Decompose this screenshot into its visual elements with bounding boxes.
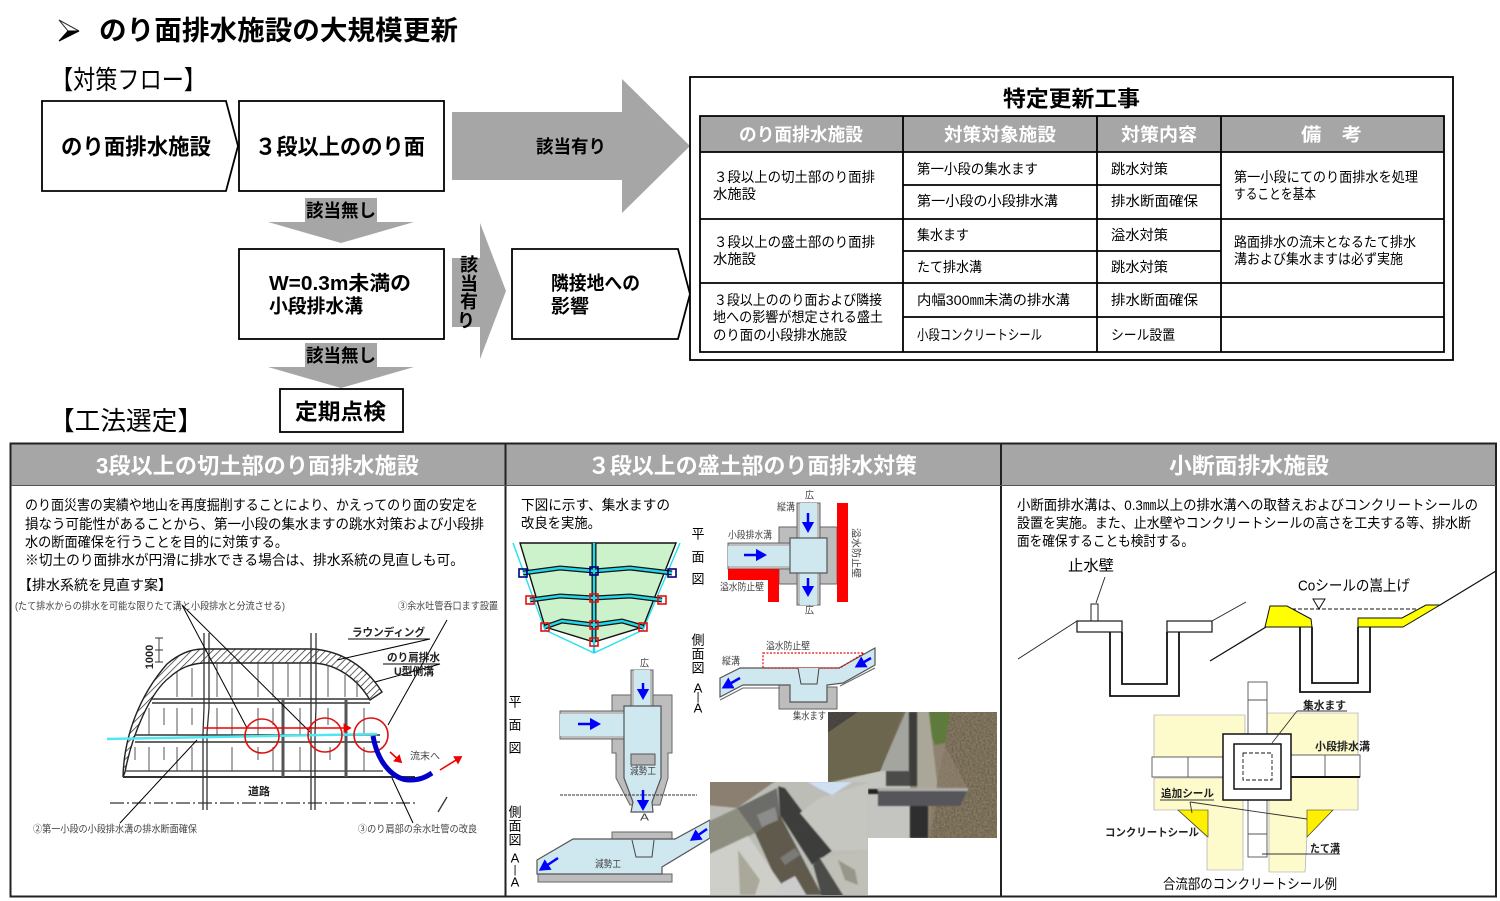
- diagram: lower 平面図 improved basin: A: [640, 812, 649, 824]
- leaders: [1160, 711, 1347, 854]
- table body text: 溝および集水ますは必ず実施: [1234, 251, 1403, 267]
- table body text: することを基本: [1234, 186, 1316, 202]
- text block: panel 2 description: 改良を実施。: [521, 515, 601, 531]
- diagram: 止水壁 channel section: [1018, 558, 1246, 696]
- slope rounding band: [123, 649, 382, 777]
- panel heading 3: 小断面排水施設: [1169, 454, 1329, 478]
- table body text: 排水断面確保: [1111, 193, 1198, 209]
- arrow: 該当無し down 1: [268, 198, 414, 243]
- diagram labels: ③余水吐管呑口ます設置: [398, 600, 498, 612]
- arrow: 該当有り right 2: 該: [460, 255, 478, 275]
- plan labels: たて溝: [1310, 841, 1340, 855]
- cyan drain line: [107, 734, 377, 739]
- plan labels: [1105, 698, 1370, 855]
- diagram: lower 平面図 improved basin: [560, 658, 697, 824]
- text block: panel 2 description: 下図に示す、集水ますの: [521, 497, 670, 513]
- diagram: lower 側面図 improved basin: [537, 820, 710, 882]
- table body text: のり面の小段排水施設: [713, 327, 847, 343]
- table body text: ３段以上ののり面および隣接: [714, 292, 882, 308]
- table header row: 対策対象施設: [944, 125, 1056, 145]
- diagram: 側面図 collection basin: 溢水防止壁: [766, 640, 810, 652]
- diagram: 合流部のコンクリートシール plan: [1105, 682, 1370, 872]
- table body text: 内幅300㎜未満の排水溝: [917, 292, 1070, 308]
- text block: panel 1 description: 【排水系統を見直す案】: [18, 577, 172, 593]
- table body text: [713, 161, 1418, 343]
- label: 平面図 / 側面図 A-A upper: 側: [691, 632, 705, 648]
- labels: 小段排水溝: [728, 528, 772, 542]
- table body text: 地への影響が想定される盛土: [713, 309, 883, 325]
- table body text: 集水ます: [917, 227, 969, 243]
- label: 平面図 / 側面図 A-A lower: 面: [508, 818, 522, 834]
- plan labels: 小段排水溝: [1315, 739, 1370, 753]
- flow: のり面排水施設 box: [42, 101, 238, 191]
- flow: 隣接地への影響 box: 隣接地への: [551, 272, 640, 294]
- arrow: 該当有り right: 該当有り: [536, 137, 606, 157]
- icon: title arrow bullet: [59, 20, 79, 41]
- panel heading 1: 3段以上の切土部のり面排水施設: [96, 454, 419, 478]
- table body text: 水施設: [713, 251, 756, 267]
- diagram labels: 道路: [248, 784, 270, 798]
- text block: panel 1 description: [18, 497, 484, 593]
- table header row: 対策内容: [1121, 125, 1197, 145]
- table body text: 跳水対策: [1111, 161, 1168, 177]
- labels: 溢水防止壁: [720, 580, 764, 594]
- table header row: 備 考: [1301, 125, 1362, 145]
- diagram: lower 側面図 improved basin: 減勢工: [595, 858, 621, 870]
- photo: improved basin close-up: [710, 782, 868, 895]
- label: 平面図 / 側面図 A-A upper: 図: [691, 572, 705, 586]
- label: 平面図 / 側面図 A-A upper: 平: [691, 526, 705, 542]
- heading: 工法選定: 【工法選定】: [49, 406, 203, 436]
- photo: installed drainage on slope: [828, 712, 997, 838]
- diagram labels: ③のり肩部の余水吐管の改良: [358, 822, 477, 836]
- flow: 定期点検 box: 定期点検: [295, 400, 386, 424]
- flow: W=0.3m未満の小段排水溝 box: W=0.3m未満の: [269, 272, 411, 295]
- arrow: 該当有り right 2: [452, 223, 506, 359]
- table body text: 第一小段にてのり面排水を処理: [1234, 169, 1418, 185]
- labels: 広: [805, 490, 814, 502]
- diagram labels: のり肩排水: [387, 650, 440, 664]
- diagram: drainage layout of cut slope: [15, 600, 498, 836]
- arrow: 該当無し down 2: [268, 343, 414, 388]
- diagram labels: 1000: [144, 645, 156, 669]
- diagram: Coシール嵩上げ channel section: [1210, 571, 1496, 692]
- table body text: 跳水対策: [1111, 259, 1168, 275]
- label: 平面図 / 側面図 A-A lower: 平: [508, 694, 522, 710]
- diagram: Coシール嵩上げ channel section: Coシールの嵩上げ: [1298, 578, 1410, 594]
- title: のり面排水施設の大規模更新: [99, 16, 458, 46]
- table body text: 路面排水の流末となるたて排水: [1234, 234, 1416, 250]
- arrow: 該当有り right 2: 当: [460, 274, 478, 294]
- table body text: 水施設: [713, 186, 756, 202]
- arrow: 該当無し down 1: 該当無し: [306, 201, 376, 221]
- text block: panel 1 description: 水の断面確保を行うことを目的に対策する。: [25, 534, 288, 550]
- text block: panel 2 description: [521, 497, 670, 531]
- table header row: [700, 116, 1444, 152]
- red arrow: [203, 727, 350, 729]
- flow: 3段以上ののり面 box: ３段以上ののり面: [255, 134, 425, 160]
- channels and basin: [1152, 682, 1360, 857]
- table header row: のり面排水施設: [739, 125, 863, 145]
- diagram labels: ②第一小段の小段排水溝の排水断面確保: [33, 822, 197, 836]
- text block: panel 1 description: ※切土のり面排水が円滑に排水できる場合は、排水系統の見直しも可。: [25, 552, 464, 568]
- arrow: 該当有り right 2: り: [457, 311, 475, 331]
- diagram: 平面図 collection basin: [720, 490, 862, 616]
- plan labels: コンクリートシール: [1105, 826, 1199, 839]
- labels: 縦溝: [777, 500, 795, 514]
- flow: 定期点検 box: [280, 389, 403, 432]
- diagram: 止水壁 channel section: 止水壁: [1068, 558, 1114, 574]
- plan labels: 追加シール: [1161, 786, 1214, 800]
- red flow arrows: [390, 752, 461, 770]
- label: 平面図 / 側面図 A-A lower: 面: [508, 718, 522, 732]
- blue discharge pipe: [373, 736, 432, 780]
- diagram labels: U型側溝: [394, 664, 434, 678]
- diagram labels: 流末へ: [410, 750, 440, 762]
- labels: 溢水防止壁: [850, 528, 862, 578]
- plan labels: 集水ます: [1303, 698, 1346, 712]
- label: 平面図 / 側面図 A-A upper: 図: [691, 660, 705, 676]
- diagram: embankment slope overview: [513, 543, 680, 653]
- label: 平面図 / 側面図 A-A upper: 面: [691, 550, 705, 564]
- table body text: ３段以上の盛土部のり面排: [714, 234, 875, 250]
- arrow: 該当有り right 2: 有: [460, 292, 478, 312]
- text block: panel 3 description: 面を確保することも検討する。: [1017, 533, 1194, 549]
- red circles: [245, 718, 388, 753]
- diagram: 側面図 collection basin: [720, 640, 875, 722]
- flow: 隣接地への影響 box: [512, 249, 690, 339]
- heading: 対策フロー: 【対策フロー】: [51, 65, 206, 95]
- diagram labels: ラウンディング: [352, 625, 425, 639]
- label: 平面図 / 側面図 A-A upper: |: [697, 691, 699, 703]
- label: 平面図 / 側面図 A-A upper: A: [694, 680, 703, 696]
- table body text: 第一小段の小段排水溝: [917, 193, 1058, 209]
- additional seal yellow triangles: [1178, 810, 1208, 837]
- blue flow arrows: [744, 513, 808, 592]
- label: 平面図 / 側面図 A-A upper: [691, 526, 705, 716]
- labels: [720, 490, 862, 616]
- text block: panel 1 description: のり面災害の実績や地山を再度掘削することにより、かえってのり面の安定を: [25, 497, 478, 513]
- labels: 広: [805, 604, 814, 616]
- diagram labels: (たて排水からの排水を可能な限りたて溝と小段排水と分流させる): [15, 600, 285, 612]
- text block: panel 1 description: 損なう可能性があることから、第一小段の集水ますの跳水対策および小段排: [25, 516, 484, 532]
- flow: W=0.3m未満の小段排水溝 box: 小段排水溝: [269, 296, 363, 318]
- diagram: lower 平面図 improved basin: 広: [640, 658, 649, 670]
- table body text: 排水断面確保: [1111, 292, 1198, 308]
- text block: panel 3 description: 小断面排水溝は、0.3㎜以上の排水溝への取替えおよびコンクリートシールの: [1017, 497, 1478, 513]
- table body text: たて排水溝: [917, 259, 982, 275]
- table title: 特定更新工事: [1003, 86, 1140, 112]
- label: 平面図 / 側面図 A-A upper: 面: [691, 646, 705, 662]
- diagram labels: [15, 600, 498, 836]
- table body text: 小段コンクリートシール: [917, 327, 1042, 343]
- table body text: シール設置: [1111, 327, 1175, 343]
- arrow: 該当無し down 2: 該当無し: [306, 346, 376, 366]
- table body text: ３段以上の切土部のり面排: [714, 169, 875, 185]
- flow: W=0.3m未満の小段排水溝 box: [239, 249, 444, 339]
- text block: panel 3 description: [1017, 497, 1478, 549]
- caption: 合流部のコンクリートシール例: 合流部のコンクリートシール例: [1163, 876, 1337, 892]
- diagram: 側面図 collection basin: 縦溝: [722, 654, 740, 668]
- flow: 3段以上ののり面 box: [239, 101, 444, 191]
- label: 平面図 / 側面図 A-A lower: A: [511, 850, 520, 866]
- label: 平面図 / 側面図 A-A upper: A: [694, 700, 703, 716]
- flow: 隣接地への影響 box: 影響: [551, 296, 589, 318]
- label: 平面図 / 側面図 A-A lower: 側: [508, 804, 522, 820]
- leader lines: [120, 605, 447, 823]
- table body text: 第一小段の集水ます: [917, 161, 1038, 177]
- arrow: 該当有り right: [452, 79, 690, 213]
- red overflow walls: [728, 503, 848, 602]
- label: 平面図 / 側面図 A-A lower: 図: [508, 832, 522, 848]
- label: 平面図 / 側面図 A-A lower: A: [511, 874, 520, 890]
- table body text: 溢水対策: [1111, 227, 1168, 243]
- panel: 特定更新工事 table: [690, 77, 1453, 360]
- diagram: lower 平面図 improved basin: 減勢工: [630, 764, 656, 778]
- panel: 工法選定 frame and headers: [10, 444, 1496, 897]
- text block: panel 3 description: 設置を実施。また、止水壁やコンクリートシールの高さを工夫する等、排水断: [1017, 515, 1471, 531]
- panel heading 2: ３段以上の盛土部のり面排水対策: [588, 454, 917, 478]
- label: 平面図 / 側面図 A-A lower: 図: [508, 740, 522, 756]
- diagram: 側面図 collection basin: 集水ます: [793, 710, 826, 722]
- label: 平面図 / 側面図 A-A lower: |: [514, 864, 516, 876]
- label: 平面図 / 側面図 A-A lower: [508, 694, 522, 890]
- flow: のり面排水施設 box: のり面排水施設: [61, 134, 211, 160]
